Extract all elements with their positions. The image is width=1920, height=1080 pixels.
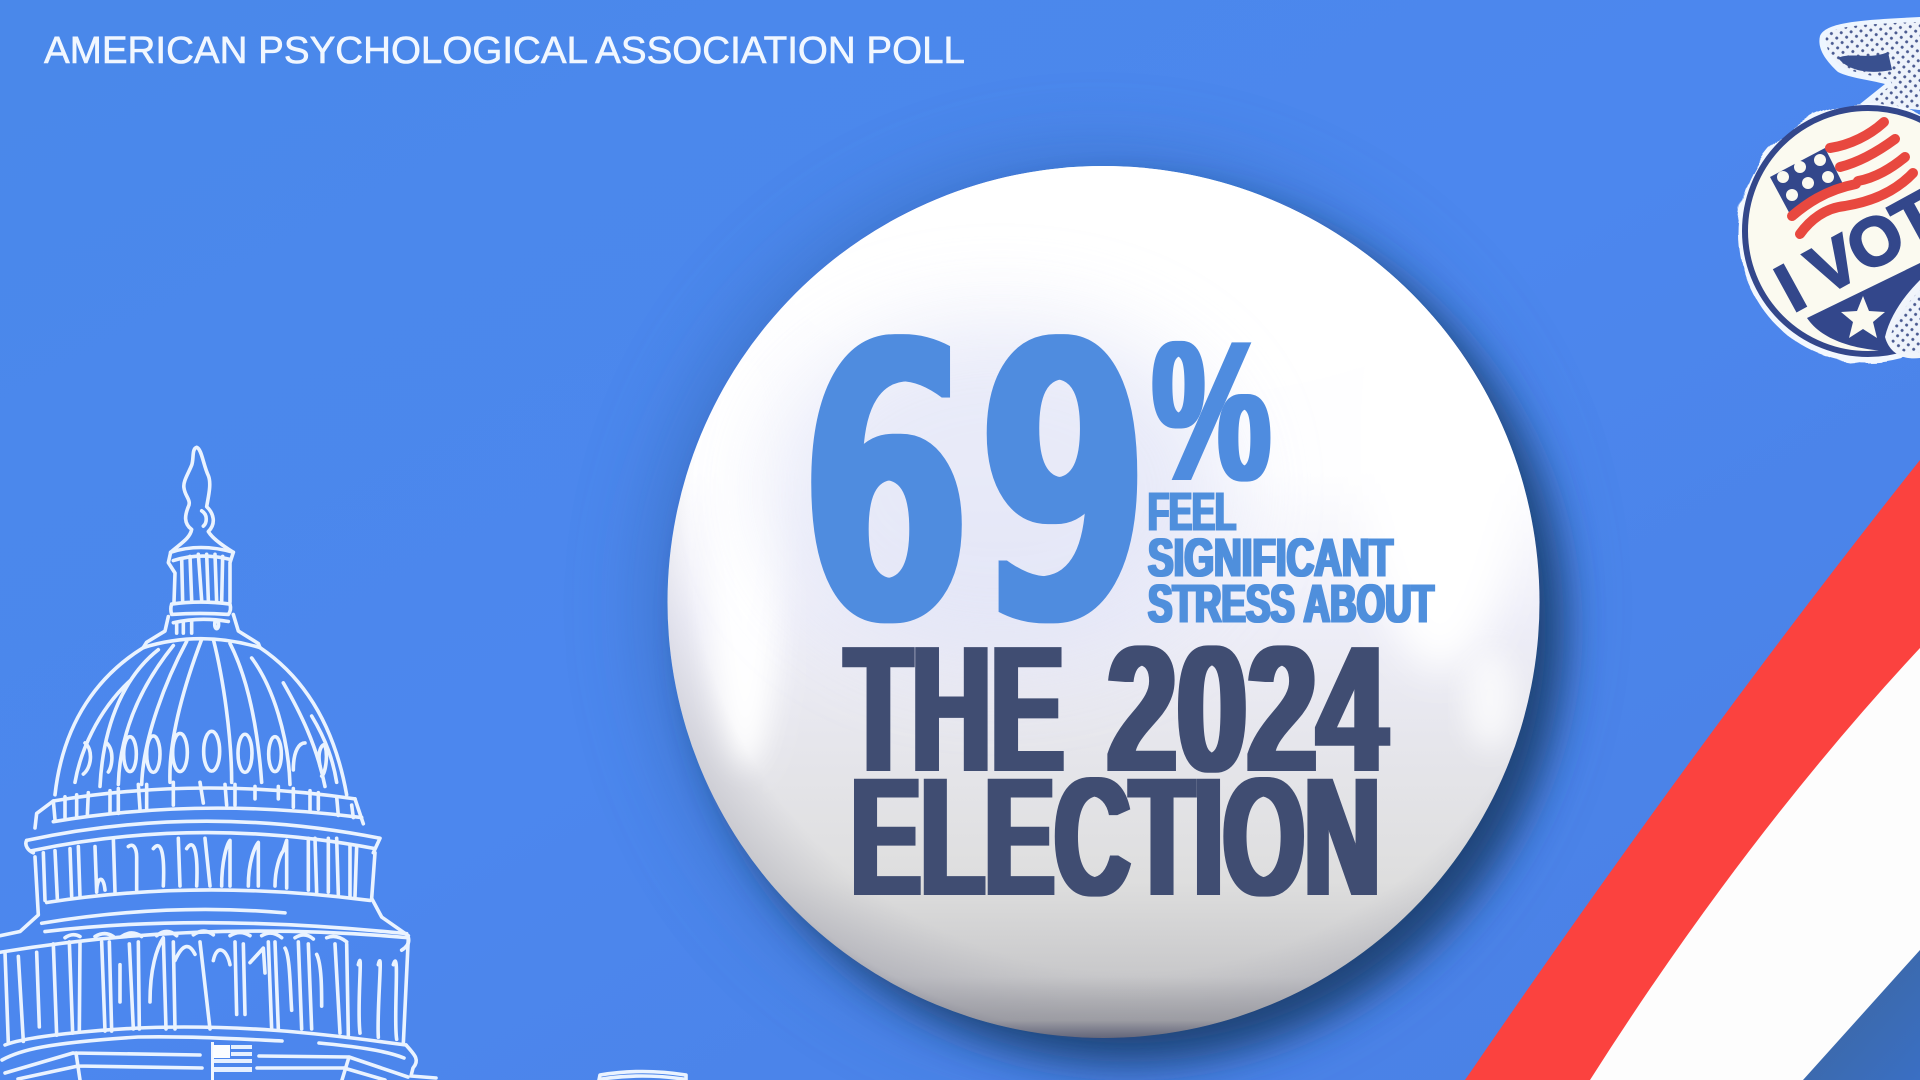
icon: hand holding i voted sticker <box>1738 17 1920 363</box>
text: feel significant stress about: STRESS ABOUT <box>1148 574 1434 634</box>
panel: campaign button <box>656 140 1564 1062</box>
text: feel significant stress about <box>1148 482 1434 634</box>
title: AMERICAN PSYCHOLOGICAL ASSOCIATION POLL <box>44 30 965 72</box>
headline: the 2024 election: 2024 <box>1107 609 1387 810</box>
big number 69%: 6 <box>800 263 971 709</box>
big number 69%: 9 <box>978 263 1149 709</box>
headline: the 2024 election <box>845 609 1387 931</box>
illustration: capitol building line art <box>0 447 686 1080</box>
headline: the 2024 election: ELECTION <box>851 742 1380 931</box>
text: feel significant stress about: FEEL <box>1148 482 1236 542</box>
big number 69%: % <box>1152 300 1271 523</box>
headline: the 2024 election: THE <box>845 609 1064 810</box>
big number 69% <box>800 263 1271 709</box>
ribbon: red white blue <box>1465 460 1920 1080</box>
icon: american flag on capitol <box>211 1042 252 1080</box>
lower stars panel of sticker <box>1807 263 1920 352</box>
text: feel significant stress about: SIGNIFICANT <box>1148 528 1393 588</box>
sticker flag <box>1770 122 1913 234</box>
